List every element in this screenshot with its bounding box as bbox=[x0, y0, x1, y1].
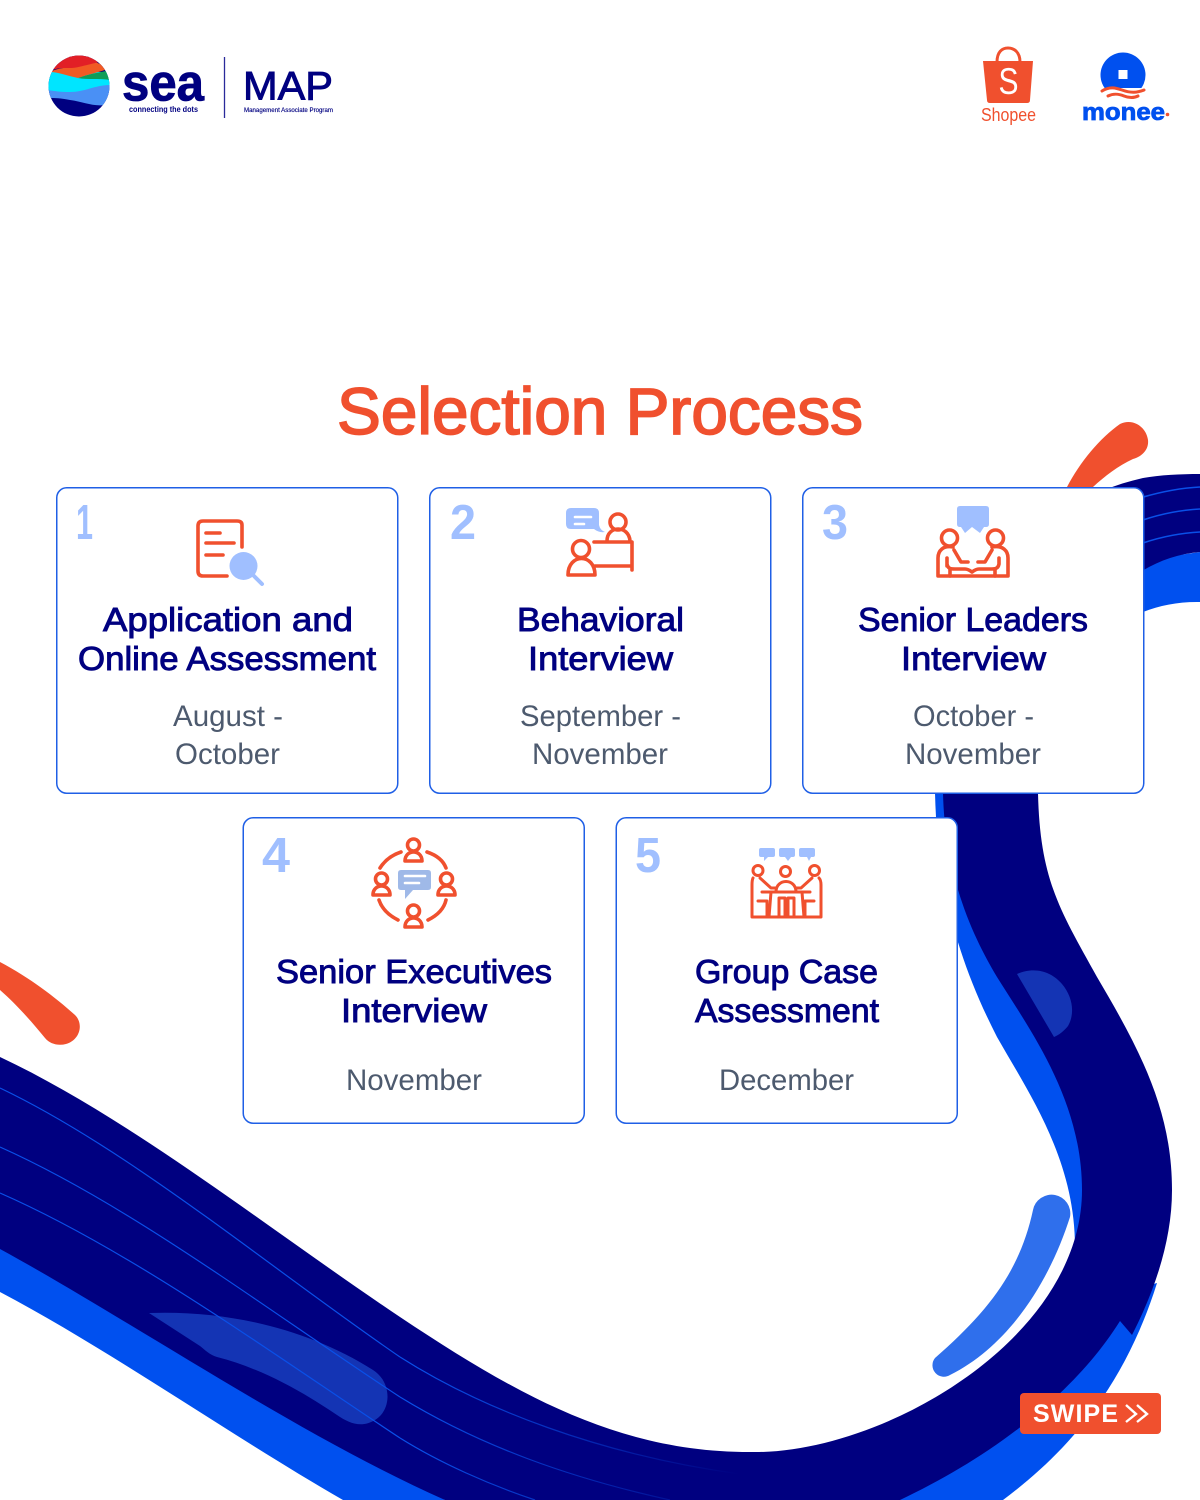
dates bbox=[905, 700, 1041, 771]
step number 5: 5 bbox=[635, 829, 661, 883]
tagline: Management Associate Program: Management Associate Program bbox=[244, 108, 333, 114]
heading bbox=[517, 601, 684, 677]
wordmark: monee: monee bbox=[1082, 99, 1165, 126]
heading bbox=[78, 601, 376, 677]
heading bbox=[858, 601, 1088, 677]
heading: Application and bbox=[103, 601, 353, 638]
dates: August - bbox=[173, 700, 283, 733]
icon: executive circle bbox=[373, 839, 455, 927]
button: swipe bbox=[1020, 1393, 1161, 1434]
wordmark: Shopee: Shopee bbox=[981, 105, 1036, 125]
panel: step 4 bbox=[243, 818, 584, 1123]
dates: October - bbox=[913, 700, 1034, 733]
heading: Senior Executives bbox=[276, 953, 552, 990]
wordmark: MAP: MAP bbox=[243, 64, 333, 108]
panel: step 1 bbox=[57, 488, 398, 793]
heading bbox=[276, 953, 552, 1029]
heading: Online Assessment bbox=[78, 640, 376, 677]
logo: Sea MAP bbox=[48, 54, 333, 118]
date: November bbox=[346, 1064, 482, 1097]
dates: November bbox=[905, 738, 1041, 771]
step number 2: 2 bbox=[450, 496, 476, 550]
dates: November bbox=[532, 738, 668, 771]
logo: Shopee: S bbox=[998, 61, 1018, 102]
step number 3: 3 bbox=[822, 496, 848, 550]
heading: Interview bbox=[901, 640, 1046, 677]
logo: Shopee bbox=[981, 48, 1036, 125]
dates bbox=[520, 700, 681, 771]
tagline: connecting the dots: connecting the dots bbox=[129, 105, 199, 114]
step number 1: 1 bbox=[76, 496, 93, 550]
panel: step 3 bbox=[803, 488, 1144, 793]
heading: Interview bbox=[341, 992, 487, 1029]
panel: step 5 bbox=[616, 818, 957, 1123]
title: Selection Process bbox=[337, 374, 863, 448]
background ribbon bbox=[0, 474, 1200, 1500]
button: swipe: SWIPE bbox=[1033, 1400, 1118, 1428]
dates: September - bbox=[520, 700, 681, 733]
icon: double chevron bbox=[1126, 1405, 1147, 1422]
icon: group discussion table bbox=[752, 848, 821, 917]
icon: desk interview bbox=[566, 508, 632, 575]
heading: Senior Leaders bbox=[858, 601, 1088, 638]
heading: Behavioral bbox=[517, 601, 684, 638]
accent: light blue stroke bbox=[932, 1195, 1070, 1377]
accent: top-right orange stroke bbox=[1067, 422, 1148, 487]
wordmark: sea: sea bbox=[122, 54, 205, 112]
dates: October bbox=[175, 738, 280, 771]
logo: monee bbox=[1082, 52, 1169, 126]
step number 4: 4 bbox=[262, 829, 290, 883]
panel: step 2 bbox=[430, 488, 771, 793]
heading: Assessment bbox=[695, 992, 879, 1029]
dates bbox=[173, 700, 283, 771]
heading bbox=[695, 953, 879, 1029]
heading: Group Case bbox=[695, 953, 878, 990]
icon: sea globe bbox=[48, 55, 110, 117]
heading: Interview bbox=[528, 640, 673, 677]
icon: document search bbox=[198, 521, 262, 584]
date: December bbox=[719, 1064, 854, 1097]
icon: two leaders talking bbox=[938, 506, 1008, 576]
accent: left orange stroke bbox=[0, 962, 80, 1045]
